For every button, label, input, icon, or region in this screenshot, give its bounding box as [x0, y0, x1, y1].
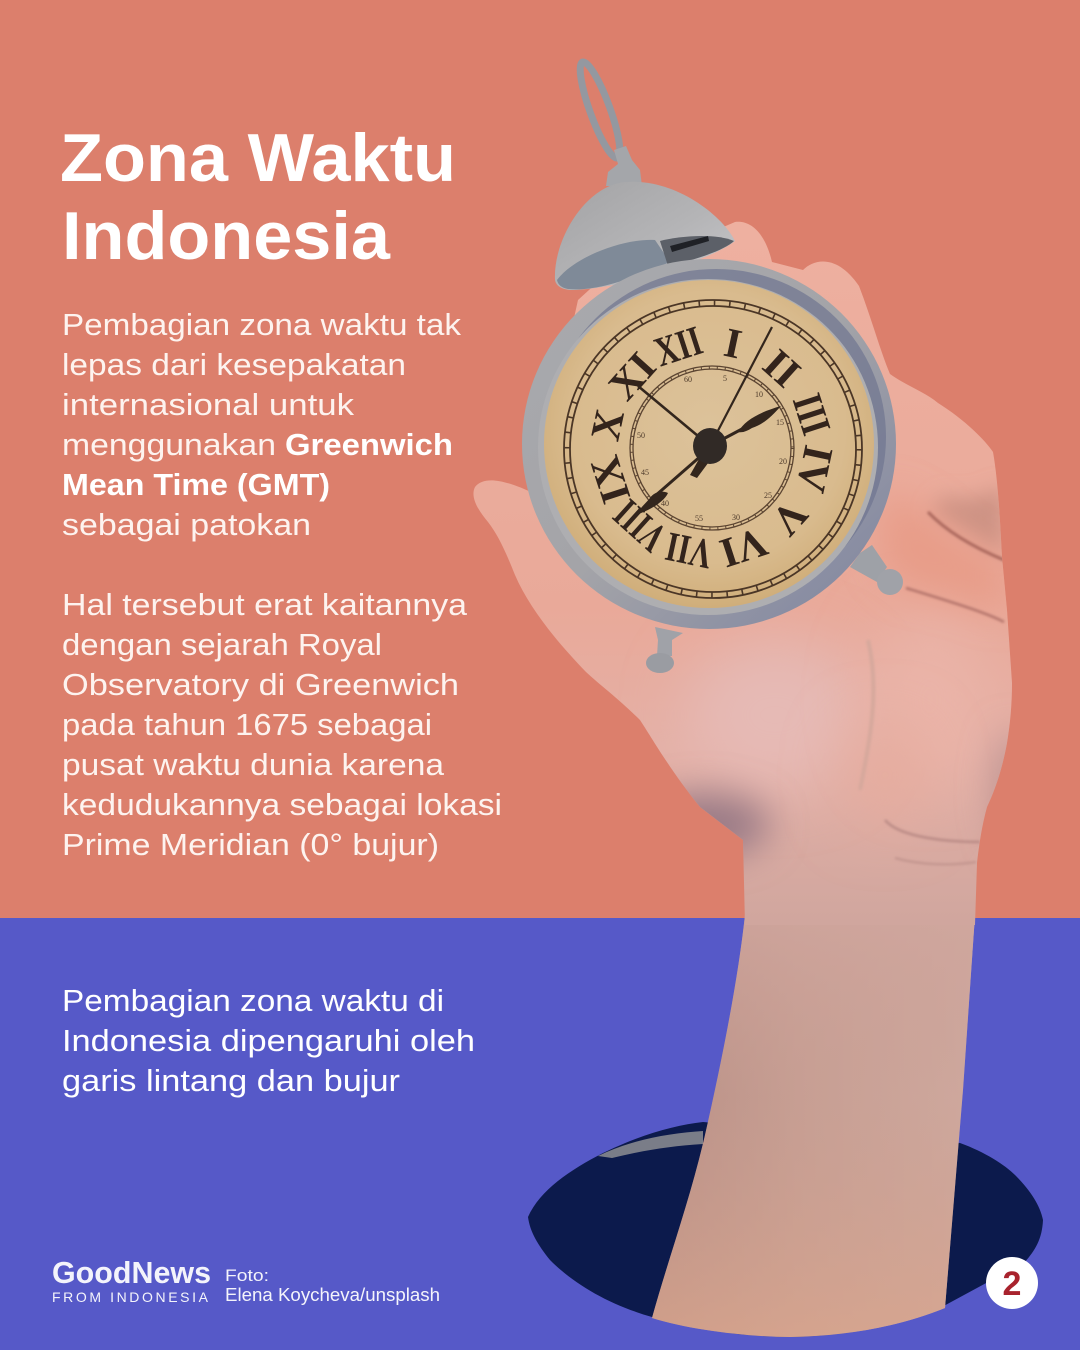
seconds numbers: 40	[661, 499, 669, 508]
roman numerals: VII	[662, 522, 716, 577]
seconds numbers: 15	[776, 418, 784, 427]
roman numerals: IV	[786, 441, 841, 496]
background: coral upper panel	[0, 0, 1080, 919]
paragraph: GMT agreement: internasional untuk	[62, 387, 355, 422]
title	[60, 120, 456, 274]
roman numerals: IX	[582, 450, 640, 509]
paragraph: Indonesia time zones: Pembagian zona waktu di	[62, 983, 444, 1018]
clock foot right	[850, 545, 903, 595]
seconds numbers: 50	[637, 431, 645, 440]
paragraph: GMT agreement: Greenwich	[285, 427, 453, 462]
seconds numbers: 5	[723, 374, 727, 383]
paragraph: Indonesia time zones	[62, 983, 475, 1098]
paragraph: GMT agreement: lepas dari kesepakatan	[62, 347, 406, 382]
photo credit	[225, 1266, 440, 1305]
roman numerals: III	[783, 388, 839, 441]
paragraph: GMT agreement: Pembagian zona waktu tak	[62, 307, 462, 342]
paragraph: GMT agreement	[62, 307, 462, 542]
roman numerals: XI	[600, 344, 666, 409]
clock bell dome	[555, 182, 735, 290]
roman numerals: II	[754, 341, 809, 397]
logo: GoodNews from Indonesia: FROM INDONESIA	[52, 1289, 211, 1305]
seconds numbers: 30	[732, 513, 740, 522]
photo credit: Elena Koycheva/unsplash	[225, 1285, 440, 1305]
roman numerals	[582, 318, 841, 577]
seconds numbers: 60	[684, 375, 692, 384]
roman numerals: VI	[714, 518, 773, 576]
paragraph: Royal Observatory history: Prime Meridian (0° bujur)	[62, 827, 439, 862]
alarm clock	[522, 59, 903, 673]
paragraph: Royal Observatory history	[62, 587, 502, 862]
title: Zona Waktu	[60, 120, 456, 196]
paragraph: Royal Observatory history: Observatory di Greenwich	[62, 667, 459, 702]
seconds numbers: 10	[755, 390, 763, 399]
logo: GoodNews from Indonesia	[52, 1255, 211, 1305]
title: Indonesia	[62, 198, 391, 274]
paragraph: Indonesia time zones: Indonesia dipengaruhi oleh	[62, 1023, 475, 1058]
paragraph: GMT agreement: sebagai patokan	[62, 507, 311, 542]
logo: GoodNews from Indonesia: GoodNews	[52, 1255, 211, 1290]
seconds numbers: 25	[764, 491, 772, 500]
paragraph: Royal Observatory history: pada tahun 1675 sebagai	[62, 707, 432, 742]
roman numerals: VIII	[605, 490, 676, 560]
seconds numbers: 20	[779, 457, 787, 466]
paragraph: Indonesia time zones: garis lintang dan bujur	[62, 1063, 400, 1098]
paragraph: Royal Observatory history: pusat waktu dunia karena	[62, 747, 445, 782]
seconds numbers: 45	[641, 468, 649, 477]
seconds numbers: 55	[695, 514, 703, 523]
photo credit: Foto:	[225, 1266, 269, 1285]
paragraph: GMT agreement: menggunakan	[62, 427, 276, 462]
background: indigo lower panel	[0, 918, 1080, 1350]
page number badge: 2	[1003, 1265, 1021, 1303]
paragraph: GMT agreement: Mean Time (GMT)	[62, 467, 330, 502]
clock ring handle	[573, 59, 627, 161]
clock hands	[636, 327, 781, 515]
roman numerals: V	[762, 491, 816, 544]
clock bell stem	[606, 146, 642, 186]
seconds numbers	[637, 374, 787, 523]
roman numerals: XII	[649, 318, 708, 376]
hand	[460, 210, 1030, 930]
roman numerals: I	[720, 320, 746, 368]
paragraph: Royal Observatory history: kedudukannya sebagai lokasi	[62, 787, 502, 822]
dark hole in the lower panel	[528, 1122, 1043, 1337]
paragraph: Royal Observatory history: Hal tersebut erat kaitannya	[62, 587, 468, 622]
paragraph: Royal Observatory history: dengan sejarah Royal	[62, 627, 382, 662]
page number badge	[986, 1257, 1038, 1309]
clock rim	[522, 259, 896, 629]
forearm shading	[652, 915, 975, 1337]
clock foot left	[646, 627, 683, 673]
seconds track	[630, 366, 794, 530]
minute track	[564, 300, 862, 598]
clock face	[544, 280, 874, 608]
forearm	[652, 915, 975, 1337]
roman numerals: X	[583, 406, 634, 445]
